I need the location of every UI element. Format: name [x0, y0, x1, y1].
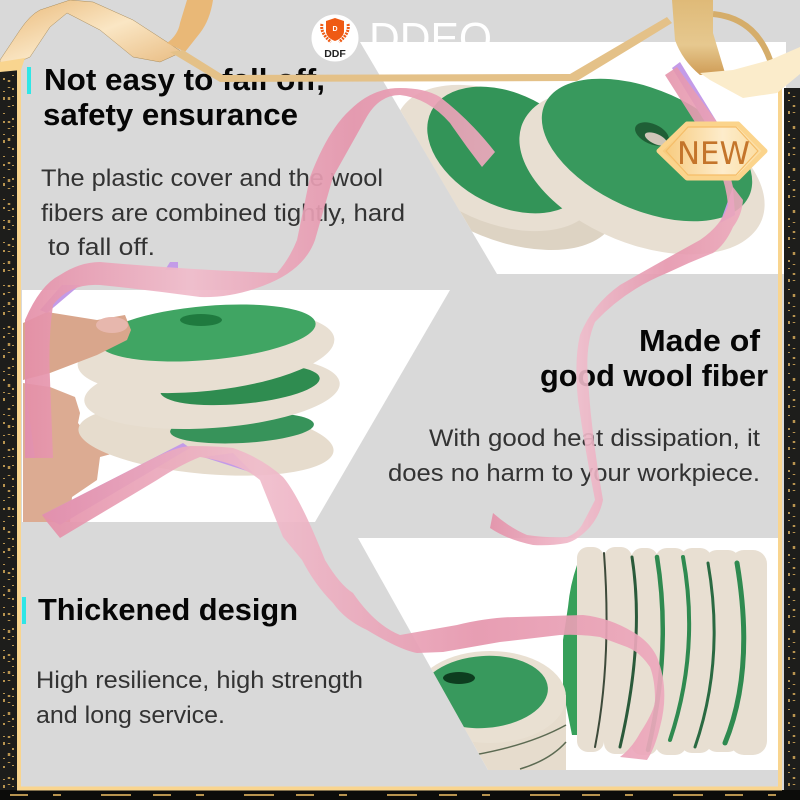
ribbon: gold top left	[0, 0, 213, 72]
ribbon: lower pink	[42, 446, 664, 760]
ribbon: right pink	[490, 67, 743, 545]
accent bar: heading 3	[22, 597, 26, 624]
panel: top right product photo	[360, 42, 789, 287]
text block: resilience description: High resilience, high strength	[36, 667, 363, 694]
heading: not easy to fall off: Not easy to fall off,	[44, 62, 325, 97]
ribbon: thin gold line	[170, 17, 672, 82]
left wool disc	[400, 84, 604, 250]
wool disc stack	[78, 304, 340, 476]
badge: NEW: NEW	[677, 136, 750, 172]
ribbon: upper left pink	[25, 88, 495, 458]
text block: plastic cover description: to fall off.	[48, 234, 155, 261]
hand: thumb	[23, 312, 131, 380]
text block: heat dissipation description: With good heat dissipation, it	[429, 425, 760, 452]
badge: NEW	[659, 124, 765, 178]
ribbon: gold top right	[672, 0, 800, 98]
text block: resilience description: and long service.	[36, 702, 225, 729]
text block: resilience description	[36, 667, 363, 729]
text block: heat dissipation description: does no harm to your workpiece.	[388, 460, 760, 487]
watermark brand text: DDEO	[369, 14, 492, 63]
lower left wool disc stack	[431, 651, 566, 770]
panel: bottom product photo	[358, 538, 778, 770]
text block: plastic cover description: The plastic cover and the wool	[41, 165, 383, 192]
logo: DDF: DDF	[324, 48, 346, 60]
heading: made of good wool fiber: good wool fiber	[540, 358, 768, 393]
accent bar: heading 1	[27, 67, 31, 94]
ribbon: purple shadows	[25, 62, 735, 525]
side view wool disc stack	[563, 547, 767, 755]
heading: made of good wool fiber: Made of	[639, 323, 761, 358]
heading: thickened design: Thickened design	[38, 592, 298, 627]
icon: orange shield emblem: D	[332, 26, 338, 33]
right wool disc	[519, 78, 765, 254]
text block: plastic cover description: fibers are combined tightly, hard	[41, 200, 405, 227]
text block: plastic cover description	[41, 165, 405, 261]
logo: DDF	[312, 14, 358, 62]
panel: middle product photo	[22, 290, 450, 522]
heading line: safety ensurance: safety ensurance	[43, 97, 298, 132]
hand: fingers and palm	[23, 383, 115, 522]
heading: made of good wool fiber	[540, 323, 768, 393]
text block: heat dissipation description	[388, 425, 760, 487]
